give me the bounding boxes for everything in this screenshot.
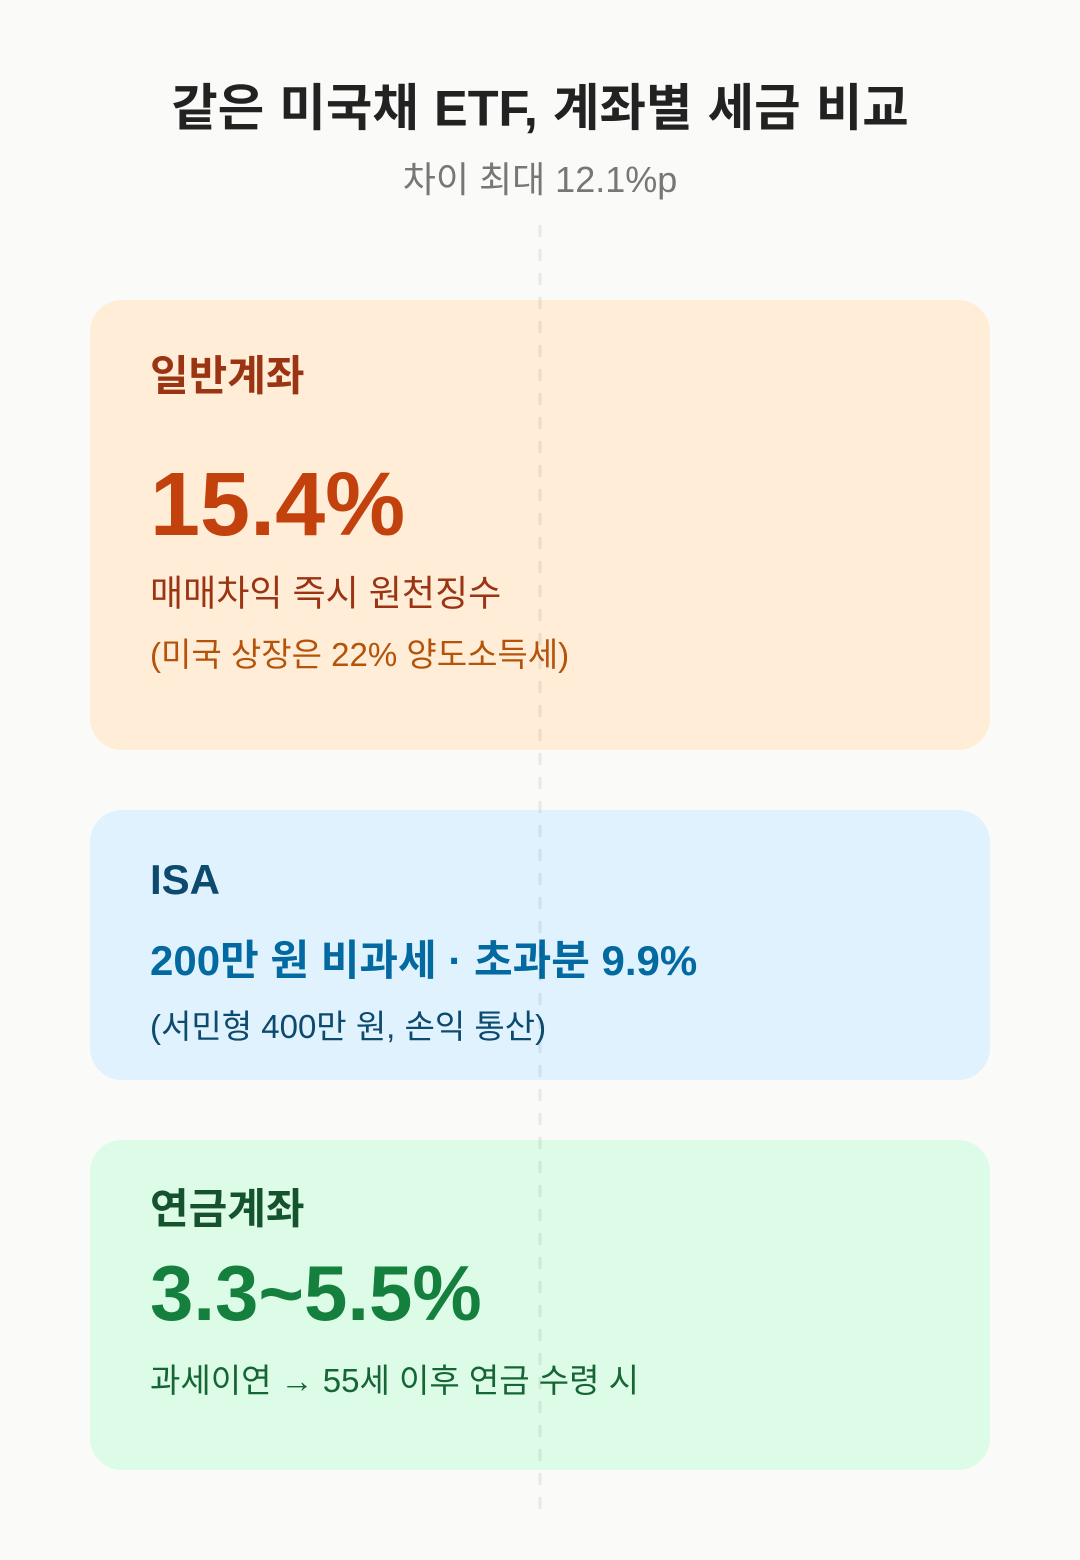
panel: ISA [90, 810, 990, 1080]
title: 같은 미국채 ETF, 계좌별 세금 비교 [171, 80, 909, 136]
ISA note: (서민형 400만 원, 손익 통산) [150, 1008, 546, 1045]
general account note: (미국 상장은 22% 양도소득세) [150, 636, 569, 673]
pension account rate: 3.3~5.5% [150, 1249, 482, 1337]
general account heading: 일반계좌 [150, 352, 305, 400]
subtitle: 차이 최대 12.1%p [403, 159, 677, 200]
panel: general account [90, 300, 990, 750]
general account rate: 15.4% [150, 455, 405, 555]
panel: pension account [90, 1140, 990, 1470]
ISA rate: 200만 원 비과세 · 초과분 9.9% [150, 937, 697, 984]
pension account description: 과세이연 → 55세 이후 연금 수령 시 [150, 1362, 639, 1399]
pension account heading: 연금계좌 [150, 1186, 305, 1232]
ISA heading: ISA [150, 856, 220, 903]
general account description: 매매차익 즉시 원천징수 [150, 572, 501, 614]
